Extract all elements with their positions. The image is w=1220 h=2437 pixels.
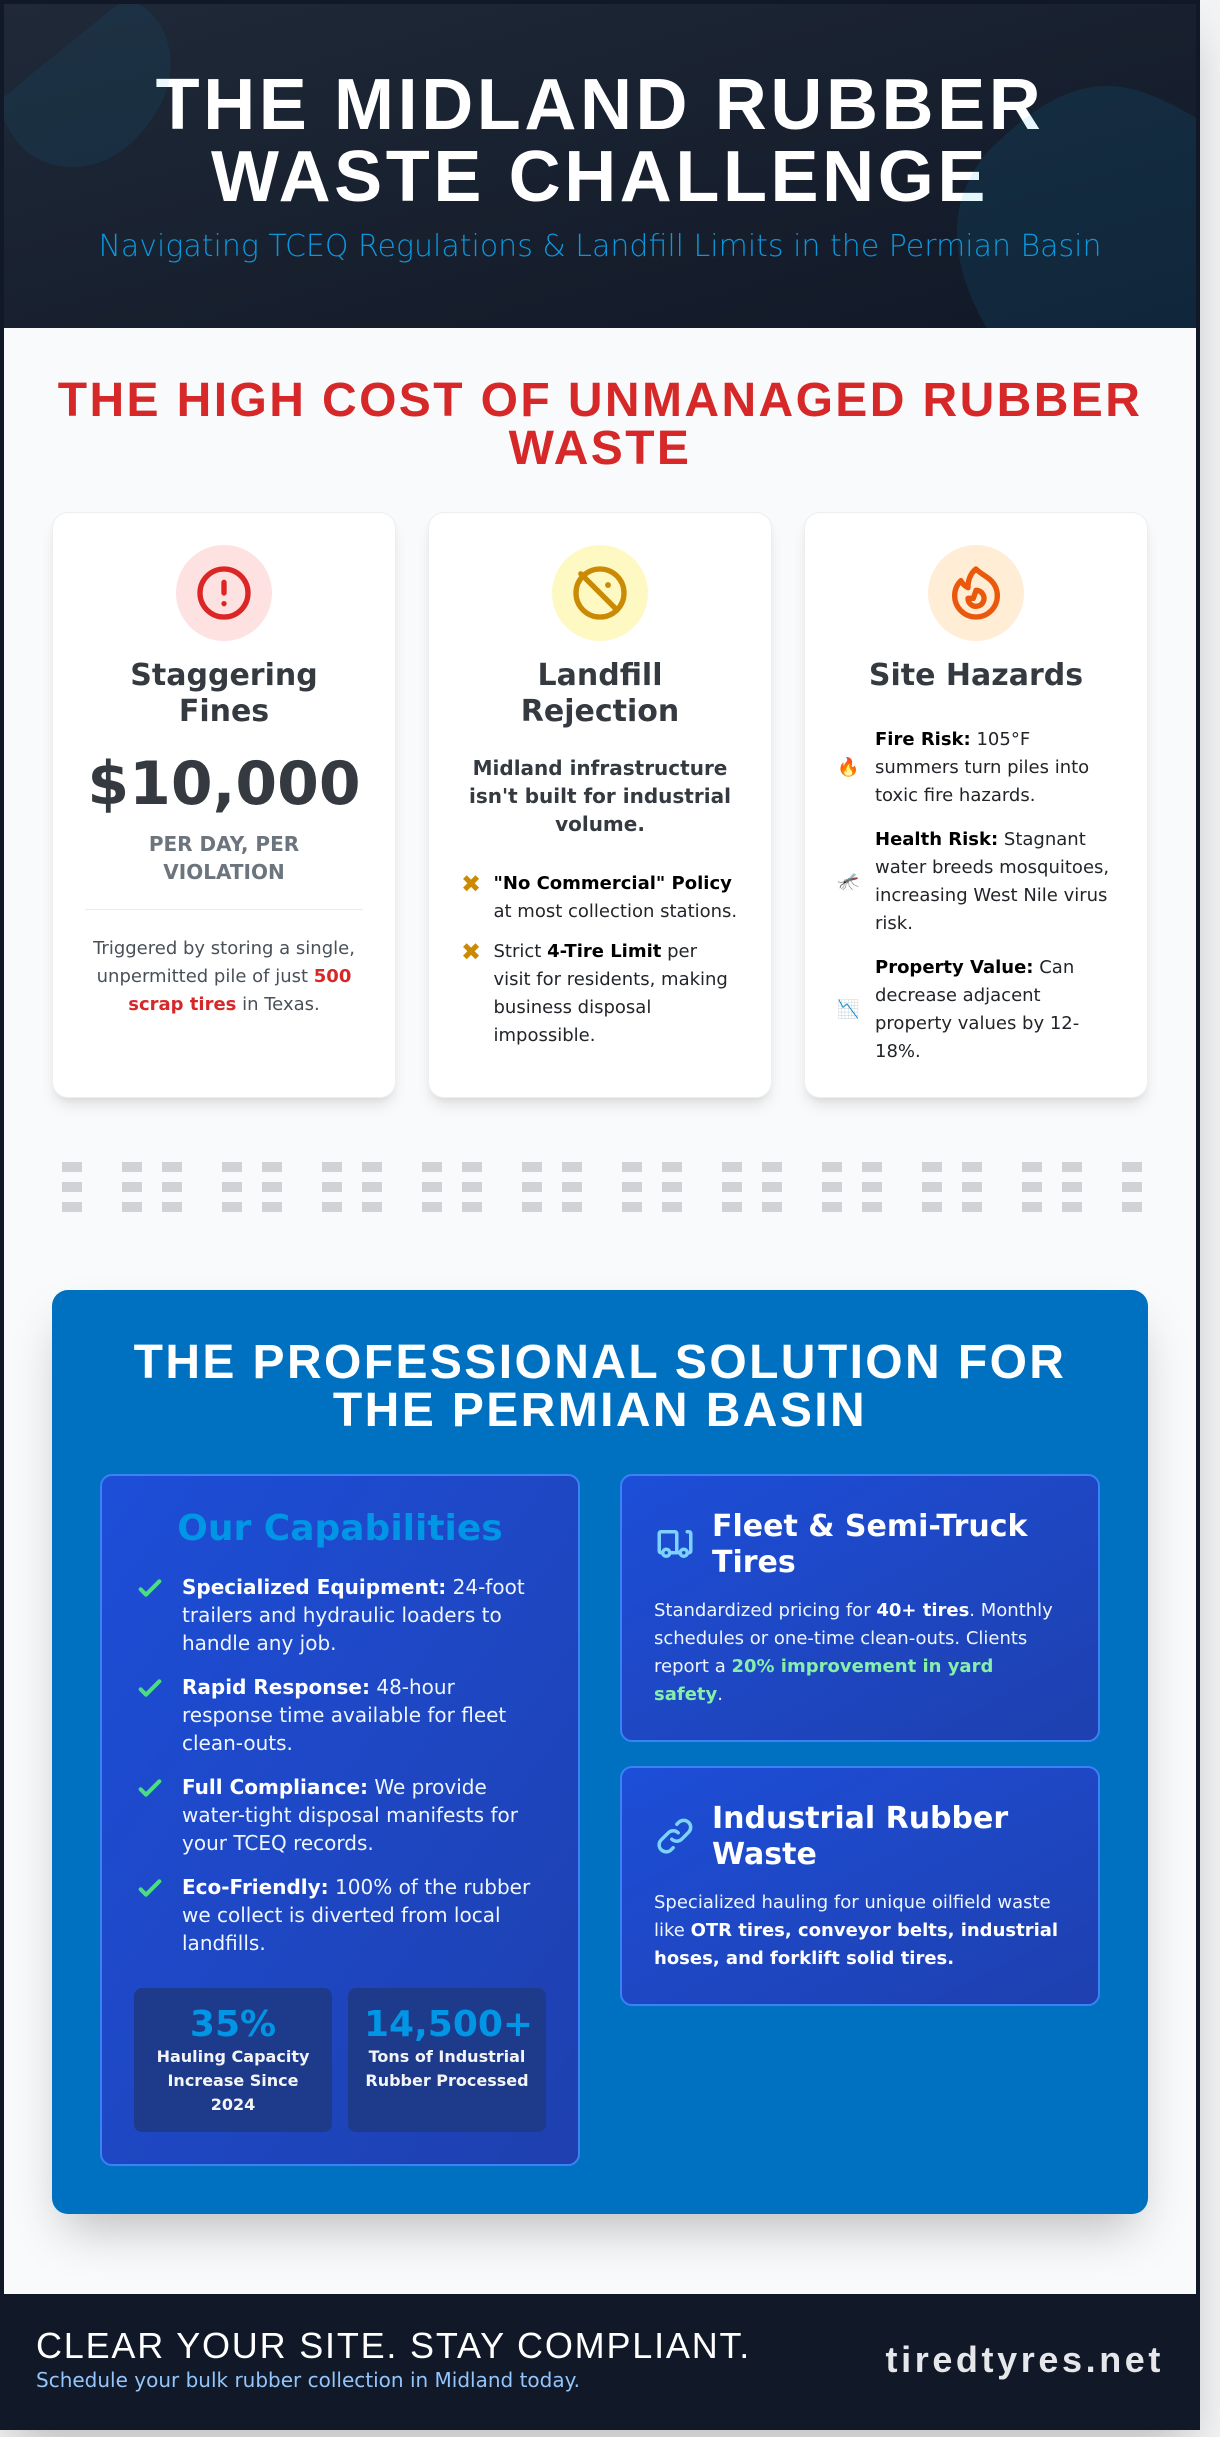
decorative header blobs <box>4 4 1196 328</box>
panel: landfill rejection <box>428 512 772 1098</box>
hazard list <box>837 729 1109 1062</box>
call to action subtext: Schedule your bulk rubber collection in Midland today. <box>36 2368 580 2392</box>
lead text: Midland infrastructure isn't built for industrial volume. <box>469 756 731 836</box>
solution columns <box>100 1474 1100 2166</box>
service cards column <box>620 1474 1100 2006</box>
solution heading: THE PROFESSIONAL SOLUTION FOR THE PERMIAN BASIN <box>134 1336 1066 1437</box>
rejection list <box>461 870 737 1046</box>
panel: our capabilities <box>100 1474 580 2166</box>
capabilities heading: Our Capabilities <box>177 1508 503 1549</box>
card heading: Site Hazards <box>869 658 1083 693</box>
three problem cards <box>51 512 1149 1108</box>
capability: eco-friendly: Eco-Friendly: 100% of the rubber we collect is diverted from local landfills. <box>182 1875 530 1955</box>
stat boxes <box>134 1988 546 2132</box>
list item: four tire limit: Strict 4-Tire Limit per visit for residents, making business disposal impossible. <box>494 941 728 1046</box>
list item: no commercial policy: ✖ <box>461 870 481 898</box>
hazard: health risk: 🦟 <box>837 871 859 892</box>
panel: professional solution <box>52 1290 1148 2214</box>
panel: fleet and semi-truck tires <box>620 1474 1100 1742</box>
subtitle: Navigating TCEQ Regulations & Landfill Limits in the Permian Basin <box>98 229 1102 264</box>
stat: hauling capacity: 35% <box>190 2004 276 2045</box>
capability: rapid response: Rapid Response: 48-hour response time available for fleet clean-outs. <box>182 1675 506 1755</box>
service description: Standardized pricing for 40+ tires. Monthly schedules or one-time clean-outs. Clients report a 20% improvement in yard safety. <box>654 1600 1053 1705</box>
footer <box>4 2294 1196 2426</box>
list item: four tire limit: ✖ <box>461 938 481 966</box>
panel: site hazards <box>804 512 1148 1098</box>
call to action heading: CLEAR YOUR SITE. STAY COMPLIANT. <box>36 2325 751 2366</box>
stat: tons processed: Tons of Industrial Rubber Processed <box>365 2047 529 2090</box>
hazard: property value: Property Value: Can decrease adjacent property values by 12-18%. <box>875 957 1079 1062</box>
hazard: property value: 📉 <box>837 999 859 1020</box>
fine trigger text: Triggered by storing a single, unpermitted pile of just 500 scrap tires in Texas. <box>93 938 355 1015</box>
stat: hauling capacity <box>134 1988 332 2132</box>
fine amount: $10,000 <box>87 749 361 819</box>
call to action <box>36 2325 751 2392</box>
list item: no commercial policy: "No Commercial" Policy at most collection stations. <box>494 873 737 922</box>
section: high cost of unmanaged waste <box>51 374 1149 1108</box>
panel: staggering fines <box>52 512 396 1098</box>
stat: tons processed: 14,500+ <box>364 2004 533 2045</box>
section heading: THE HIGH COST OF UNMANAGED RUBBER WASTE <box>58 374 1142 475</box>
stat: tons processed <box>348 1988 546 2132</box>
service heading with link icon: Industrial Rubber Waste <box>712 1801 1008 1872</box>
title: THE MIDLAND RUBBER WASTE CHALLENGE <box>156 65 1044 217</box>
hazard: fire risk: Fire Risk: 105°F summers turn piles into toxic fire hazards. <box>875 729 1089 806</box>
hazard: fire risk: 🔥 <box>837 757 859 778</box>
icon: ban <box>552 545 648 641</box>
panel: industrial rubber waste <box>620 1766 1100 2006</box>
fine unit: PER DAY, PER VIOLATION <box>149 832 299 884</box>
website: tiredtyres.net <box>886 2339 1164 2380</box>
stat: hauling capacity: Hauling Capacity Increase Since 2024 <box>157 2047 309 2114</box>
header banner <box>4 4 1196 328</box>
capability: full compliance: Full Compliance: We provide water-tight disposal manifests for your TCEQ records. <box>182 1775 518 1855</box>
dashed road divider <box>62 1162 1142 1212</box>
service description: Specialized hauling for unique oilfield waste like OTR tires, conveyor belts, industrial hoses, and forklift solid tires. <box>654 1892 1058 1969</box>
card heading: Landfill Rejection <box>521 658 679 729</box>
capability: specialized equipment: Specialized Equipment: 24-foot trailers and hydraulic loaders to handle any job. <box>182 1575 525 1655</box>
card heading: Staggering Fines <box>130 658 318 729</box>
hazard: health risk: Health Risk: Stagnant water breeds mosquitoes, increasing West Nile virus risk. <box>875 829 1109 934</box>
service heading with truck icon: Fleet & Semi-Truck Tires <box>712 1509 1027 1580</box>
icon: fire <box>928 545 1024 641</box>
icon: exclamation circle <box>176 545 272 641</box>
